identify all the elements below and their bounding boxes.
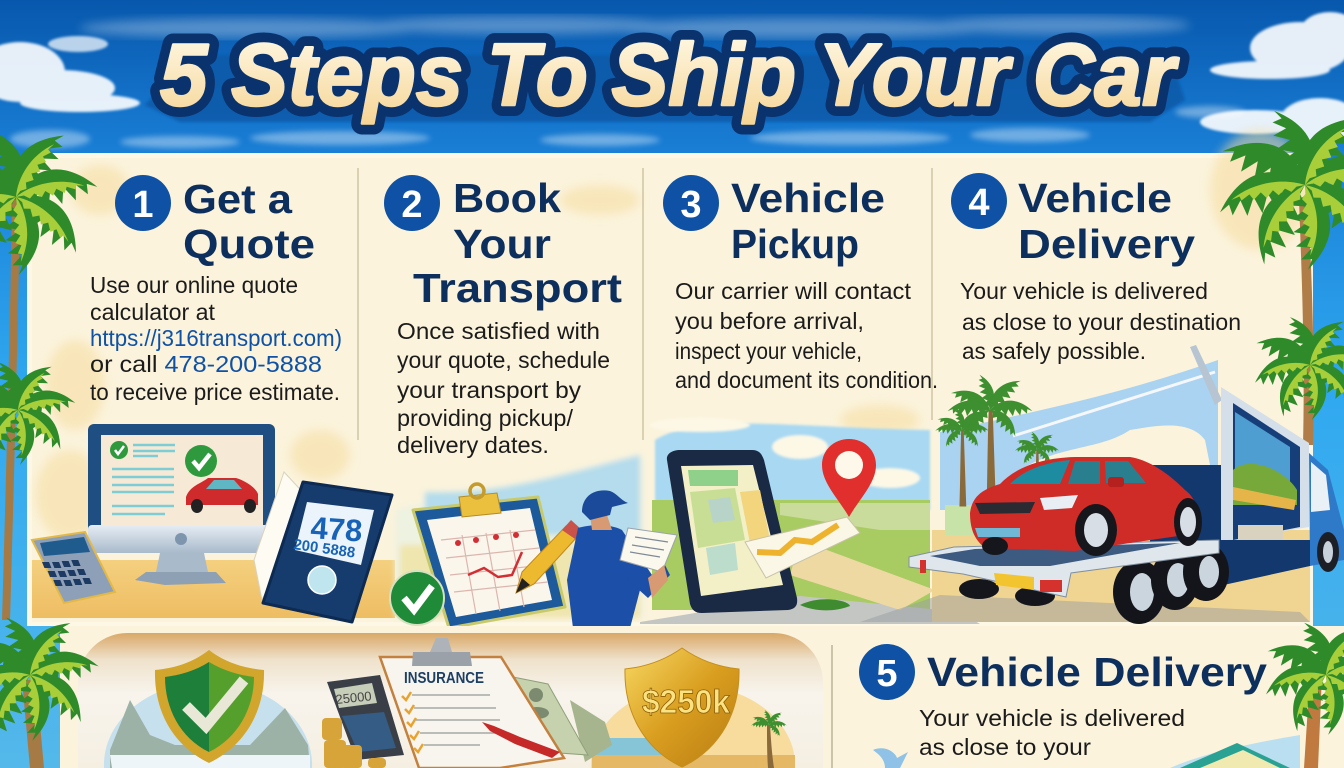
body text 2: your quote, schedule [397, 347, 610, 373]
palm: top right [1215, 103, 1344, 271]
body text 2 [397, 318, 610, 458]
heading 4: Delivery [1018, 221, 1195, 267]
icon: folded route map [745, 517, 860, 578]
number badge 4: 4 [968, 182, 990, 224]
body text 1: to receive price estimate. [90, 379, 340, 405]
body text 4: as safely possible. [962, 338, 1146, 364]
title: 5 Steps To Ship Your Car [160, 25, 1180, 124]
heading 2: Transport [413, 265, 622, 311]
heading 2: Your [453, 221, 551, 267]
body text 4: as close to your destination [962, 309, 1241, 335]
body text 3: you before arrival, [675, 308, 864, 334]
scene: step 1 desk [32, 560, 395, 618]
scene: house and sea [873, 735, 1300, 768]
body text 2: providing pickup/ [397, 405, 574, 431]
body text 3: and document its condition. [675, 367, 938, 393]
icon: gold shield $250k: $250k [642, 683, 731, 720]
palm: bottom right [1262, 617, 1344, 768]
body text 5 [919, 705, 1185, 760]
figure: driver with document [567, 490, 677, 628]
palm: top right trunk [1299, 200, 1314, 445]
number badge 3: 3 [680, 184, 702, 226]
heading 2: Book [453, 175, 561, 221]
panel: bottom right cream [826, 626, 1344, 768]
icon: gold shield $250k [625, 648, 739, 767]
heading 3 [731, 175, 885, 267]
palm: top left [0, 122, 99, 620]
icon: calculator [32, 532, 115, 603]
scene: snowy mountains [104, 693, 312, 768]
palm: mid right [1252, 312, 1344, 421]
title: 5 Steps To Ship Your Car [160, 25, 1180, 124]
body text 2: delivery dates. [397, 432, 549, 458]
body text 5: Your vehicle is delivered [919, 705, 1185, 731]
number badge 5 [859, 644, 915, 700]
number badge 1: 1 [132, 184, 154, 226]
body text 3: Our carrier will contact [675, 278, 912, 304]
heading 5: Vehicle Delivery [927, 649, 1267, 695]
number badge 2 [384, 175, 440, 231]
body text 1: Use our online quote [90, 272, 298, 298]
heading 4: Vehicle [1018, 175, 1172, 221]
number badge 2: 2 [401, 184, 423, 226]
step 3: vehicle pickup [663, 175, 938, 613]
scene: step 2 seaside [395, 455, 643, 618]
step 5: vehicle delivery [832, 644, 1300, 768]
icon: phone: 200 5888 [292, 536, 356, 562]
truck with car [909, 345, 1344, 624]
heading 2 [413, 175, 622, 311]
palm: mid left [0, 357, 77, 466]
heading 4 [1018, 175, 1195, 267]
icon: green check [390, 571, 444, 625]
icon: pencil [516, 520, 582, 593]
body text 5: as close to your [919, 734, 1091, 760]
icon: tablet with map [667, 450, 797, 613]
icon: calculator and coins [322, 675, 404, 768]
body text 1 [90, 272, 342, 405]
body text 2: Once satisfied with [397, 318, 600, 344]
icon: calendar clipboard [413, 484, 565, 628]
heading 1 [184, 184, 314, 266]
body text 1: https://j316transport.com) [90, 325, 342, 351]
scene: step 3 landscape [640, 418, 980, 624]
icon: phone [254, 472, 392, 622]
body text 3: inspect your vehicle, [675, 338, 862, 364]
body text 1: calculator at [90, 299, 216, 325]
heading 3: Pickup [731, 221, 859, 267]
heading 1: Quote [183, 221, 315, 267]
number badge 5: 5 [876, 653, 898, 695]
scene: step 4 ground [860, 530, 1310, 622]
number badge 1 [115, 175, 171, 231]
icon: green shield [155, 650, 264, 763]
body text 1: or call 478-200-5888 [90, 351, 322, 377]
icon: cash stack [513, 677, 612, 762]
icon: computer monitor [88, 424, 275, 585]
icon: red location pin [822, 439, 876, 517]
palm: bottom left [0, 611, 100, 768]
heading 1: Get a [183, 176, 293, 222]
body text 2: your transport by [397, 377, 582, 403]
clouds [0, 12, 1344, 148]
icon: calculator and coins: 25000 [335, 688, 372, 707]
scene: beach [591, 685, 795, 768]
step 4: vehicle delivery [909, 173, 1344, 624]
icon: insurance clipboard [380, 638, 564, 768]
heading 3: Vehicle [731, 175, 885, 221]
bottom left backdrop [60, 626, 830, 768]
body text 4: Your vehicle is delivered [960, 278, 1208, 304]
body text 4 [960, 278, 1241, 364]
icon: insurance clipboard: INSURANCE [404, 670, 484, 687]
body text 3 [675, 278, 938, 393]
panel: insurance illustration [78, 633, 823, 768]
number badge 3 [663, 175, 719, 231]
panel: steps background [27, 130, 1313, 626]
step 1: get a quote [32, 175, 392, 622]
icon: phone: 478 [310, 510, 364, 549]
number badge 4 [951, 173, 1007, 229]
